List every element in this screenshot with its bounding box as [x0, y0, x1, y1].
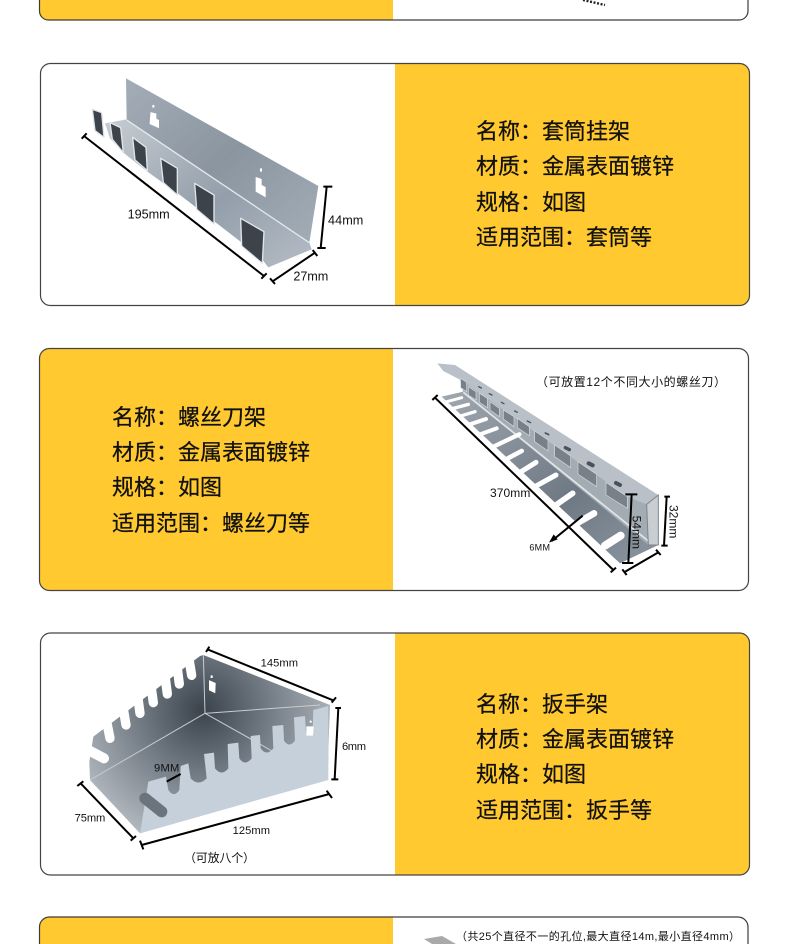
dimension labels: 27mm — [293, 270, 328, 284]
text block: screwdriver rack specs: 材质：金属表面镀锌 — [112, 440, 310, 465]
dimension labels: 195mm — [128, 208, 170, 222]
dimension labels: 54mm — [630, 516, 644, 549]
product image: socket rack with dimensions — [82, 78, 363, 284]
screwdriver tabs — [461, 378, 627, 508]
lip slots — [479, 387, 620, 485]
dimension lines — [77, 647, 341, 849]
text block: wrench rack specs: 名称：扳手架 — [476, 692, 608, 717]
product image: screwdriver rack with dimensions — [432, 363, 680, 575]
icon: dimension line fragment — [583, 0, 605, 5]
note: hole sizes: （共25个直径不一的孔位,最大直径14m,最小直径4mm） — [456, 929, 740, 943]
text block: screwdriver rack specs: 适用范围：螺丝刀等 — [112, 511, 310, 536]
text block: screwdriver rack specs: 名称：螺丝刀架 — [112, 405, 266, 430]
dimension labels: 370mm — [490, 486, 530, 500]
bottom card fragment — [40, 917, 748, 944]
panel: wrench rack — [40, 633, 750, 875]
text block: socket rack specs: 材质：金属表面镀锌 — [476, 154, 674, 179]
dimension labels — [490, 486, 680, 552]
product image fragment — [424, 936, 456, 944]
product image: wrench rack with dimensions — [75, 647, 366, 849]
X slot — [145, 798, 162, 812]
text block: socket rack specs: 适用范围：套筒等 — [476, 225, 652, 250]
dimension labels: 9MM — [154, 762, 179, 774]
text block: screwdriver rack specs — [112, 405, 310, 536]
text block: socket rack specs — [476, 119, 674, 250]
left wall notches — [85, 655, 192, 758]
dimension labels: 75mm — [75, 813, 105, 825]
top card fragment — [40, 0, 748, 20]
panel: screwdriver rack — [40, 348, 748, 590]
text block: wrench rack specs — [476, 692, 674, 823]
capacity note: （可放置12个不同大小的螺丝刀） — [536, 374, 726, 389]
text block: socket rack specs: 规格：如图 — [476, 190, 586, 215]
dimension lines — [432, 395, 670, 575]
dimension lines — [82, 133, 332, 284]
front wall — [140, 706, 328, 833]
text block: wrench rack specs: 材质：金属表面镀锌 — [476, 727, 674, 752]
panel: socket rack — [40, 64, 750, 306]
dimension labels — [128, 208, 363, 284]
dimension labels — [75, 658, 366, 837]
dimension labels: 145mm — [261, 658, 298, 670]
icon: hanging holes — [151, 105, 158, 127]
icon: hanging holes — [210, 675, 215, 692]
dimension labels: 44mm — [328, 214, 363, 228]
dimension labels: 125mm — [233, 825, 270, 837]
capacity note: （可放八个） — [184, 850, 255, 865]
arrowhead — [549, 534, 558, 543]
floor slots — [447, 398, 621, 546]
dimension labels: 6MM — [529, 542, 550, 552]
dimension labels: 32mm — [666, 505, 680, 538]
text block: screwdriver rack specs: 规格：如图 — [112, 475, 222, 500]
text block: socket rack specs: 名称：套筒挂架 — [476, 119, 630, 144]
dimension labels: 6mm — [342, 741, 366, 753]
text block: wrench rack specs: 适用范围：扳手等 — [476, 798, 652, 823]
text block: wrench rack specs: 规格：如图 — [476, 762, 586, 787]
